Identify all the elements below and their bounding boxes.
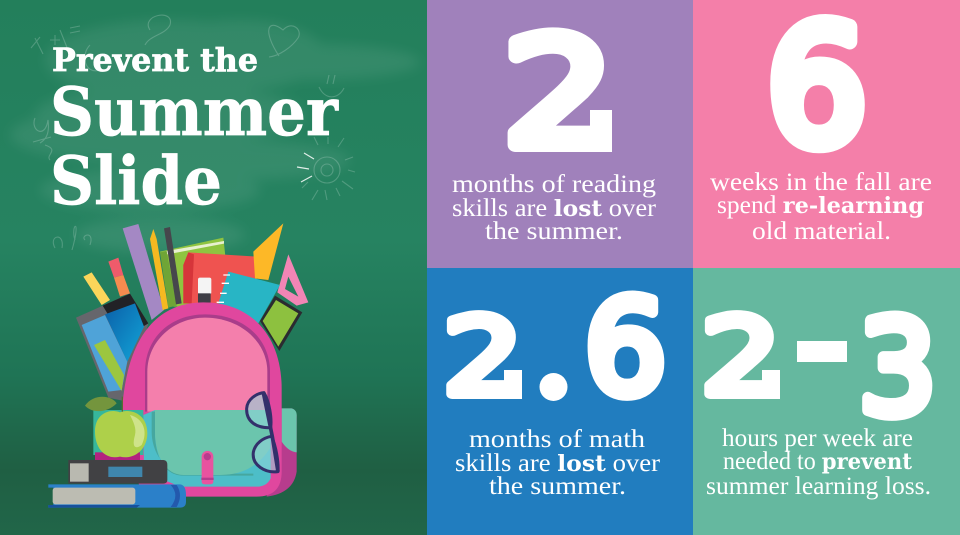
panel: 2.6 months of math <box>427 268 693 535</box>
title: Summer <box>50 73 339 151</box>
icon: tablet <box>76 294 148 402</box>
math text: months of math <box>469 426 646 453</box>
big number: 2.6 <box>443 272 666 424</box>
title <box>50 41 339 220</box>
icon: glasses <box>247 393 278 472</box>
icon: side pocket <box>93 410 143 462</box>
big number: 2: 2 <box>503 8 614 181</box>
title: Prevent the <box>52 41 258 79</box>
reading text: the summer. <box>485 218 623 245</box>
icon: pencil <box>150 229 168 310</box>
math text: skills are lost over <box>455 450 661 477</box>
icon: dark book <box>68 460 167 484</box>
weeks text: old material. <box>752 218 891 245</box>
icon: set square pink <box>277 254 308 306</box>
illustration: backpack with school supplies <box>48 223 308 508</box>
icon: set square yellow <box>253 223 283 280</box>
big number: 2-3: 2 <box>701 296 781 419</box>
big number: 2.6: 6 <box>584 272 666 424</box>
reading text: skills are lost over <box>452 195 657 222</box>
icon: blue book <box>48 484 186 508</box>
icon: highlighters <box>83 258 130 305</box>
icon: pen <box>164 227 182 304</box>
hours text <box>706 425 931 500</box>
reading text: months of reading <box>452 171 657 198</box>
panel: 6 weeks in the fall <box>693 0 960 268</box>
big number: 2.6: 2 <box>443 296 523 419</box>
panel: 2 months of reading <box>427 0 693 268</box>
icon: apple <box>85 397 147 457</box>
icon: spiral notebook <box>217 272 280 323</box>
icon: small tablet <box>260 296 302 351</box>
panel: chalkboard <box>0 0 427 535</box>
weeks text: weeks in the fall are <box>710 169 932 196</box>
big number: 2-3: 3 <box>858 292 936 444</box>
icon: backpack <box>122 302 297 497</box>
weeks text: spend re-learning <box>717 192 924 219</box>
math text <box>455 426 661 500</box>
math text: the summer. <box>489 473 626 500</box>
icon: ruler <box>123 224 164 320</box>
big number: 2-3 <box>701 292 936 444</box>
weeks text <box>710 169 932 245</box>
icon: green book <box>160 238 231 308</box>
panel: 2-3 hours per week <box>693 268 960 535</box>
chalk doodles <box>31 15 355 250</box>
hours text: summer learning loss. <box>706 473 931 500</box>
reading text <box>452 171 657 245</box>
hours text: hours per week are <box>722 425 913 452</box>
hours text: needed to prevent <box>723 448 913 475</box>
title: Slide <box>50 142 222 220</box>
icon: red book <box>183 252 257 303</box>
